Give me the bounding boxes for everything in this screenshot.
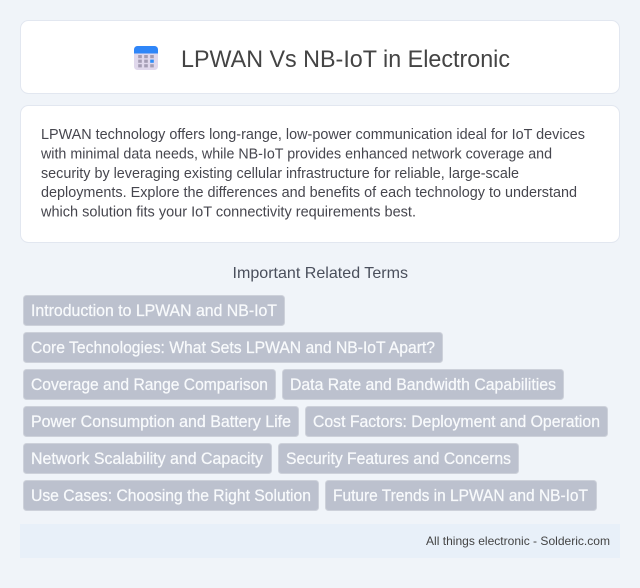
tag: security: Security Features and Concerns: [286, 450, 511, 468]
panel: description: [20, 106, 620, 242]
tag: security: [278, 444, 518, 474]
tag: data rate: [282, 370, 564, 400]
heading: important related terms: Important Related Terms: [232, 265, 408, 282]
description text: deployments. Explore the differences and benefits of each technology to understand: [41, 185, 577, 201]
tag: power consumption: Power Consumption and Battery Life: [31, 413, 291, 431]
tag: network scalability: [24, 444, 272, 474]
icon: calendar: [134, 46, 158, 70]
description text: security by leveraging existing cellular infrastructure for reliable, large-scale: [41, 166, 519, 182]
tag: power consumption: [24, 406, 298, 436]
tag: network scalability: Network Scalability and Capacity: [31, 450, 264, 468]
tag list: [24, 296, 608, 510]
tag: introduction: [24, 296, 284, 326]
description text: [40, 127, 585, 220]
header panel: [20, 20, 620, 94]
footer: [20, 524, 620, 558]
tag: coverage and range: [24, 370, 276, 400]
tag: core technologies: [24, 332, 442, 362]
tag: use cases: [24, 480, 318, 510]
description text: which solution fits your IoT connectivity requirements best.: [40, 204, 416, 220]
tag: use cases: Use Cases: Choosing the Right Solution: [31, 487, 311, 505]
title: LPWAN Vs NB-IoT in Electronic: [181, 46, 510, 73]
footer text: All things electronic - Solderic.com: [426, 534, 610, 548]
tag: introduction: Introduction to LPWAN and NB-IoT: [31, 302, 277, 320]
description text: with minimal data needs, while NB-IoT provides enhanced network coverage and: [40, 146, 552, 162]
description text: LPWAN technology offers long-range, low-power communication ideal for IoT devices: [41, 127, 585, 143]
tag: cost factors: [306, 406, 608, 436]
tag: future trends: [326, 480, 596, 510]
tag: cost factors: Cost Factors: Deployment and Operation: [313, 413, 600, 431]
tag: future trends: Future Trends in LPWAN and NB-IoT: [333, 487, 588, 505]
tag: core technologies: Core Technologies: What Sets LPWAN and NB-IoT Apart?: [31, 339, 435, 357]
tag: data rate: Data Rate and Bandwidth Capabilities: [290, 376, 556, 394]
tag: coverage and range: Coverage and Range Comparison: [31, 376, 268, 394]
